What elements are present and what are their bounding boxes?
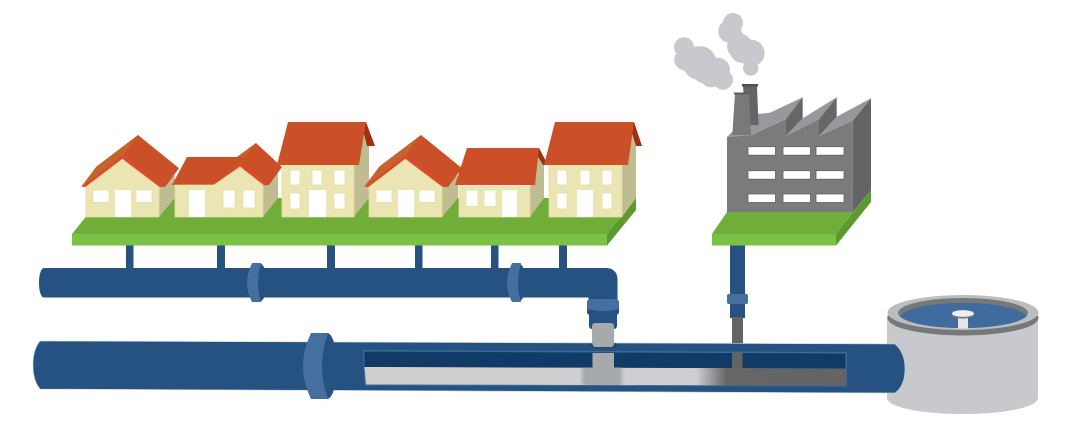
pipe body — [33, 341, 905, 393]
treatment tank — [887, 295, 1038, 414]
factory — [727, 84, 871, 212]
smoke cloud left — [674, 37, 733, 90]
factory side wall — [853, 98, 871, 212]
house 2 — [172, 143, 282, 217]
smoke cloud right — [718, 13, 765, 76]
elbow collar — [587, 299, 619, 315]
factory roofs — [727, 97, 871, 137]
tank body — [887, 315, 1038, 414]
factory ground slab — [712, 190, 871, 246]
tank rim — [888, 295, 1038, 336]
tank centre post — [952, 310, 974, 328]
pipe cutaway — [363, 350, 847, 388]
house 4 — [364, 135, 462, 217]
front chimney — [732, 92, 751, 135]
right pipe flange — [507, 263, 526, 302]
house 1 — [81, 135, 179, 217]
pipe elbow — [39, 268, 618, 302]
main sewer pipe — [33, 333, 905, 399]
pipe flange — [303, 333, 337, 399]
factory front wall — [727, 119, 853, 212]
gray drop pipe — [592, 323, 614, 347]
grey inflow stream — [582, 353, 622, 388]
factory windows — [748, 147, 844, 202]
elbow lower sleeve — [589, 310, 617, 329]
left pipe flange — [247, 263, 267, 302]
house 3 — [277, 122, 375, 217]
residential ground slab — [72, 198, 636, 246]
dark inflow stream — [732, 353, 742, 369]
house connector stems — [126, 245, 567, 270]
tank water — [898, 298, 1028, 328]
house 5 — [455, 148, 548, 217]
pipe hole for drop pipe — [590, 342, 618, 348]
rear chimney — [742, 84, 758, 125]
house 6 — [544, 122, 642, 217]
factory drain pipe — [727, 245, 748, 346]
upper collector pipe — [39, 245, 619, 347]
